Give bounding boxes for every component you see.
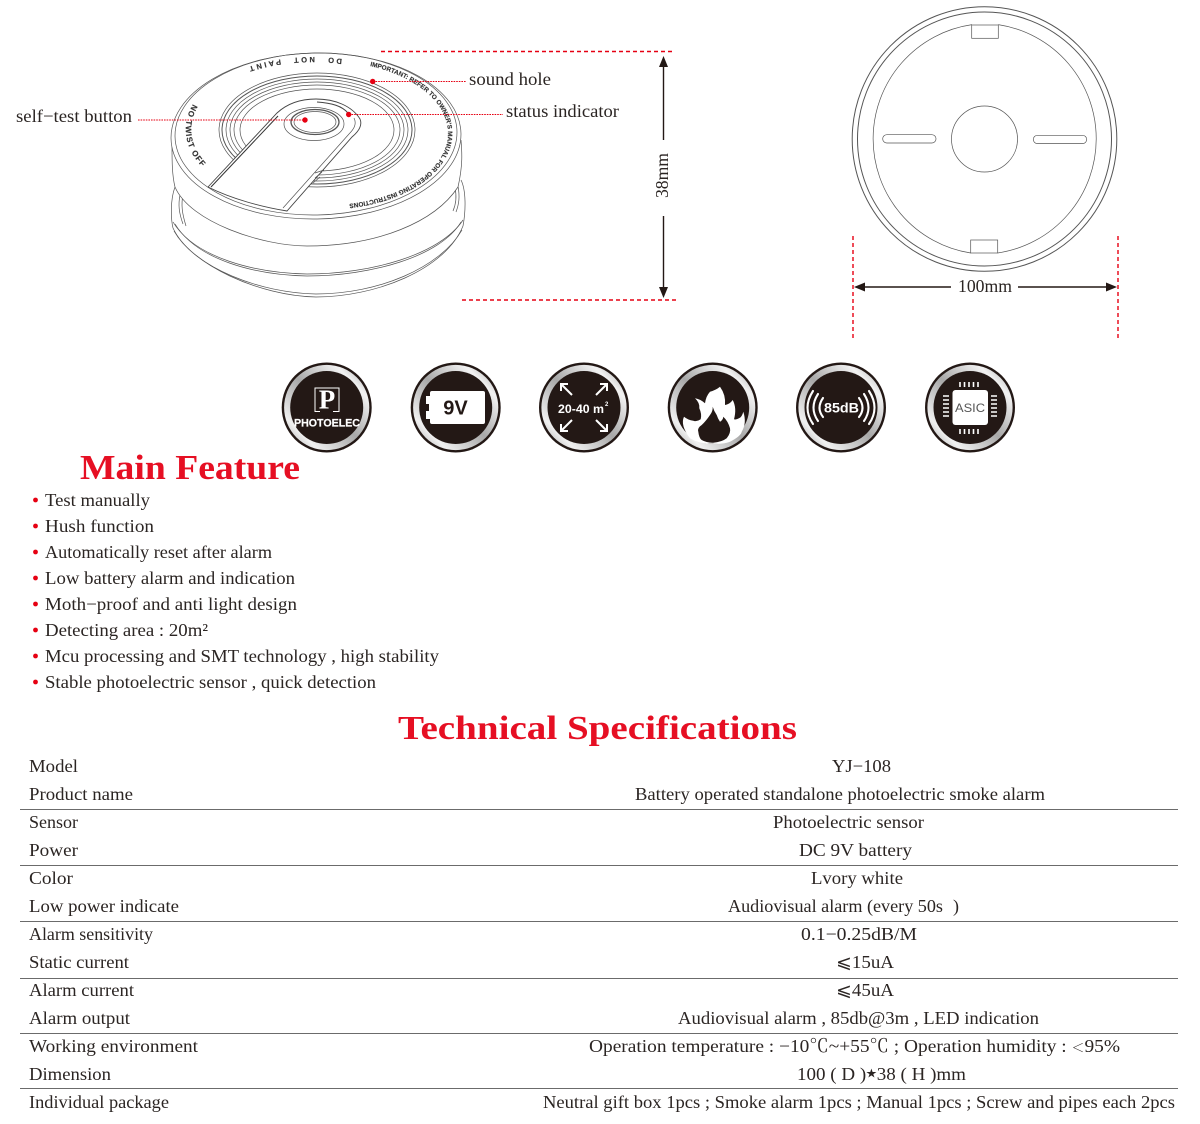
- specification table: [20, 756, 1178, 1112]
- illustration: smoke alarm perspective view: [170, 52, 466, 298]
- row: alarm current: Alarm current: [29, 980, 134, 1000]
- icon: photoelectric sensor badge: [282, 362, 372, 452]
- row: alarm sensitivity: Alarm sensitivity: [29, 924, 153, 944]
- row: alarm sensitivity: [29, 924, 917, 944]
- row: alarm output: Alarm output: [29, 1008, 130, 1028]
- callout: status indicator: [346, 101, 619, 121]
- row: static current: Static current: [29, 952, 129, 972]
- callout: self-test button: [16, 106, 308, 126]
- row: power: Power: [29, 840, 78, 860]
- callout: sound hole: sound hole: [469, 69, 551, 89]
- row: model: YJ−108: [832, 756, 891, 776]
- printed text: instructions: IMPORTANT: REFER TO OWNER'S MANUAL FOR OPERATING INSTRUCTIONS: [350, 62, 452, 208]
- icon: 20-40 square metres coverage badge: 2: [605, 402, 609, 408]
- row: working environment: [29, 1036, 1120, 1056]
- top face outer rim: [170, 50, 462, 222]
- printed text: do not paint: DO NOT PAINT: [250, 56, 342, 72]
- main body: [172, 140, 462, 246]
- feature: moth-proof: Moth−proof and anti light design: [45, 594, 297, 614]
- row: low power indicate: [29, 896, 959, 917]
- callout: self-test button: self−test button: [16, 106, 132, 126]
- groove steps: [313, 170, 324, 183]
- row: dimension: ★: [866, 1069, 877, 1080]
- feature list: [33, 490, 439, 692]
- icon: 20-40 square metres coverage badge: [539, 362, 629, 452]
- icon: ASIC chip badge: ASIC: [955, 401, 985, 415]
- row: low power indicate: Low power indicate: [29, 896, 179, 916]
- row: alarm current: ⩽45uA: [836, 980, 894, 1000]
- feature: hush function: Hush function: [45, 516, 154, 536]
- icon: flame badge: [668, 362, 758, 452]
- heading: Main Feature: Main Feature: [80, 448, 300, 487]
- icon: 85dB siren badge: [796, 362, 886, 452]
- callout: status indicator: status indicator: [506, 101, 619, 121]
- row: individual package: Individual package: [29, 1092, 169, 1112]
- dimension: height 38mm: [381, 52, 677, 300]
- row: working environment: Working environment: [29, 1036, 198, 1056]
- feature: low battery: Low battery alarm and indication: [45, 568, 295, 588]
- row: alarm output: [29, 1008, 1039, 1028]
- row: low power indicate: ): [953, 896, 959, 917]
- row: color: Color: [29, 868, 73, 888]
- row: sensor: Sensor: [29, 812, 78, 832]
- row: power: [29, 840, 912, 860]
- row: product name: Product name: [29, 784, 133, 804]
- icon: photoelectric sensor badge: P: [319, 384, 335, 414]
- row: individual package: [29, 1092, 1175, 1112]
- flap cover: [208, 99, 361, 211]
- row: static current: ⩽15uA: [836, 952, 894, 972]
- row: low power indicate: Audiovisual alarm (every 50s: [728, 896, 943, 917]
- row: dimension: [29, 1064, 966, 1085]
- feature: photoelectric sensor: Stable photoelectric sensor , quick detection: [45, 672, 376, 692]
- printed text: no twist off: NO TWIST OFF: [186, 104, 206, 166]
- row: model: Model: [29, 756, 78, 776]
- row: alarm sensitivity: 0.1−0.25dB/M: [801, 924, 917, 944]
- feature: auto reset: Automatically reset after alarm: [45, 542, 272, 562]
- dimension: diameter 100mm: 100mm: [958, 276, 1012, 296]
- row: alarm output: Audiovisual alarm , 85db@3m , LED indication: [678, 1008, 1039, 1028]
- row: static current: [29, 952, 894, 972]
- row: product name: Battery operated standalone photoelectric smoke alarm: [635, 784, 1045, 804]
- row: working environment: Operation temperature : −10℃~+55℃ ; Operation humidity : ＜95%: [589, 1036, 1120, 1056]
- icon: 85dB siren badge: 85dB: [824, 400, 859, 416]
- row: sensor: [29, 812, 924, 832]
- row: model: [29, 756, 891, 776]
- test button rings: [284, 108, 344, 140]
- row: dimension: Dimension: [29, 1064, 111, 1084]
- icon: 9V battery badge: 9V: [443, 398, 468, 420]
- row: dimension: 38 ( H )mm: [877, 1064, 966, 1085]
- row: individual package: Neutral gift box 1pcs ; Smoke alarm 1pcs ; Manual 1pcs ; Screw and pipes each 2pcs: [543, 1092, 1175, 1112]
- icon: 20-40 square metres coverage badge: 20-40 m: [558, 402, 604, 416]
- row: color: Lvory white: [811, 868, 903, 888]
- callout: sound hole: [370, 69, 551, 89]
- dimension: height 38mm: 38mm: [652, 153, 672, 198]
- heading: Technical Specifications: Technical Specifications: [398, 710, 797, 747]
- row: alarm current: [29, 980, 894, 1000]
- row: color: [29, 868, 903, 888]
- lower base: [171, 180, 465, 297]
- dimension: diameter 100mm: [853, 236, 1118, 338]
- row: sensor: Photoelectric sensor: [773, 812, 924, 832]
- icon: photoelectric sensor badge: PHOTOELEC: [294, 418, 360, 430]
- row: dimension: 100 ( D ): [797, 1064, 862, 1084]
- feature: test manually: Test manually: [45, 490, 150, 510]
- illustration: alarm base, rear view: [852, 7, 1117, 271]
- feature: mcu processing: Mcu processing and SMT technology , high stability: [45, 646, 439, 666]
- row: power: DC 9V battery: [799, 840, 912, 860]
- feature: detecting area: Detecting area : 20m²: [45, 620, 208, 640]
- icon: ASIC chip badge: [925, 362, 1015, 452]
- icon: 9V battery badge: [411, 362, 501, 452]
- concentric grooves: [219, 73, 415, 187]
- row: product name: [29, 784, 1045, 804]
